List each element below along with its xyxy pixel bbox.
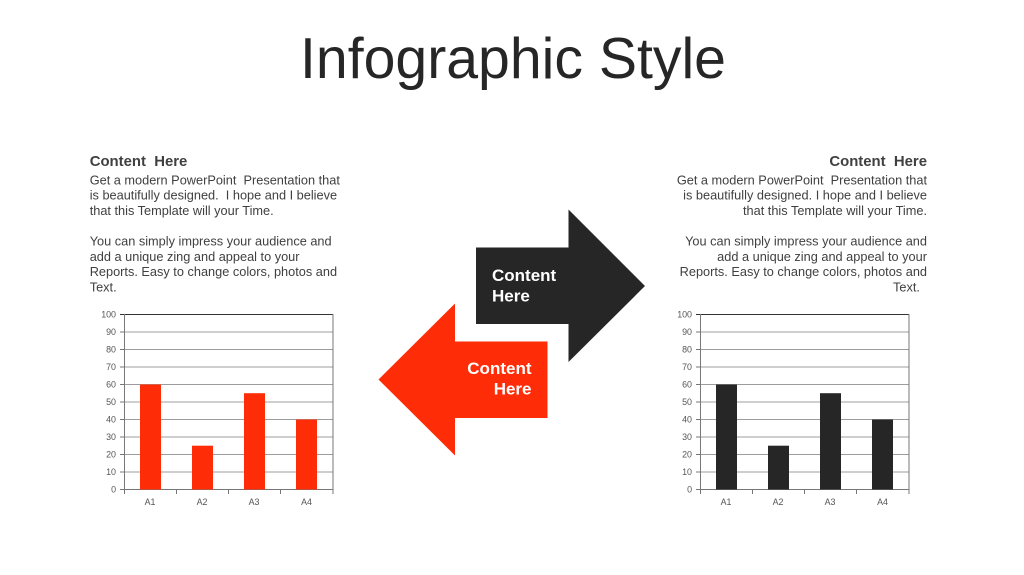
- x axis labels: right: A3: [825, 497, 835, 507]
- left body text: You can simply impress your audience and: [90, 234, 332, 249]
- y axis labels: left: 90: [106, 327, 116, 337]
- y axis labels: right: 70: [682, 362, 692, 372]
- right body text: Text.: [893, 280, 927, 294]
- y axis labels: right: 100: [677, 310, 692, 320]
- right body text: [677, 172, 928, 294]
- x axis labels: right: A2: [773, 497, 783, 507]
- left body text: Get a modern PowerPoint Presentation that: [90, 172, 340, 188]
- left heading: Content Here: [90, 154, 187, 170]
- y axis labels: left: 10: [106, 467, 116, 477]
- y axis labels: right: 50: [682, 397, 692, 407]
- right body text: that this Template will your Time.: [743, 203, 927, 218]
- bar chart: left: [101, 310, 333, 507]
- y axis labels: left: 20: [106, 450, 116, 460]
- x axis labels: left: A2: [197, 497, 207, 507]
- title: Infographic Style: [300, 27, 726, 91]
- x axis labels: right: [721, 497, 888, 507]
- y axis labels: left: 80: [106, 344, 116, 354]
- y axis labels: right: 0: [687, 484, 692, 494]
- y axis labels: right: 80: [682, 344, 692, 354]
- x axis labels: left: [145, 497, 312, 507]
- right body text: You can simply impress your audience and: [685, 234, 927, 249]
- y axis labels: left: 40: [106, 414, 116, 424]
- right heading: Content Here: [829, 154, 927, 170]
- arrow: black right: [476, 210, 645, 362]
- right body text: is beautifully designed. I hope and I believe: [683, 188, 927, 203]
- right body text: add a unique zing and appeal to your: [717, 249, 928, 264]
- y axis labels: left: 50: [106, 397, 116, 407]
- x axis labels: right: A1: [721, 497, 731, 507]
- y axis labels: left: 30: [106, 432, 116, 442]
- right body text: Get a modern PowerPoint Presentation that: [677, 172, 927, 188]
- x axis labels: right: A4: [877, 497, 888, 507]
- arrow: black right: Here: [492, 287, 530, 306]
- y axis labels: right: [677, 310, 692, 494]
- y axis labels: right: 20: [682, 450, 692, 460]
- y axis labels: right: 30: [682, 432, 692, 442]
- arrow: red left: Here: [494, 380, 532, 399]
- y axis labels: right: 90: [682, 327, 692, 337]
- bars: left: [140, 384, 317, 490]
- y axis labels: left: 0: [111, 484, 116, 494]
- y axis labels: right: 10: [682, 467, 692, 477]
- left body text: Reports. Easy to change colors, photos and: [90, 264, 337, 279]
- right text block: [677, 154, 928, 294]
- bars: right: [716, 384, 893, 490]
- x axis labels: left: A3: [249, 497, 259, 507]
- left body text: that this Template will your Time.: [90, 203, 274, 218]
- left body text: Text.: [90, 280, 117, 294]
- bar chart: right: [677, 310, 909, 507]
- y axis labels: right: 60: [682, 380, 692, 390]
- arrow: red left: [378, 304, 548, 456]
- left body text: is beautifully designed. I hope and I believe: [90, 188, 337, 203]
- arrow: black right: Content: [492, 266, 557, 285]
- y axis labels: left: 70: [106, 362, 116, 372]
- left body text: add a unique zing and appeal to your: [90, 249, 300, 264]
- x axis labels: left: A1: [145, 497, 155, 507]
- left body text: [90, 172, 340, 294]
- y axis labels: right: 40: [682, 414, 692, 424]
- x axis labels: left: A4: [301, 497, 312, 507]
- y axis labels: left: 100: [101, 310, 116, 320]
- y axis labels: left: 60: [106, 380, 116, 390]
- right body text: Reports. Easy to change colors, photos and: [680, 264, 927, 279]
- left text block: [90, 154, 340, 294]
- y axis labels: left: [101, 310, 116, 494]
- arrow: red left: Content: [467, 359, 532, 378]
